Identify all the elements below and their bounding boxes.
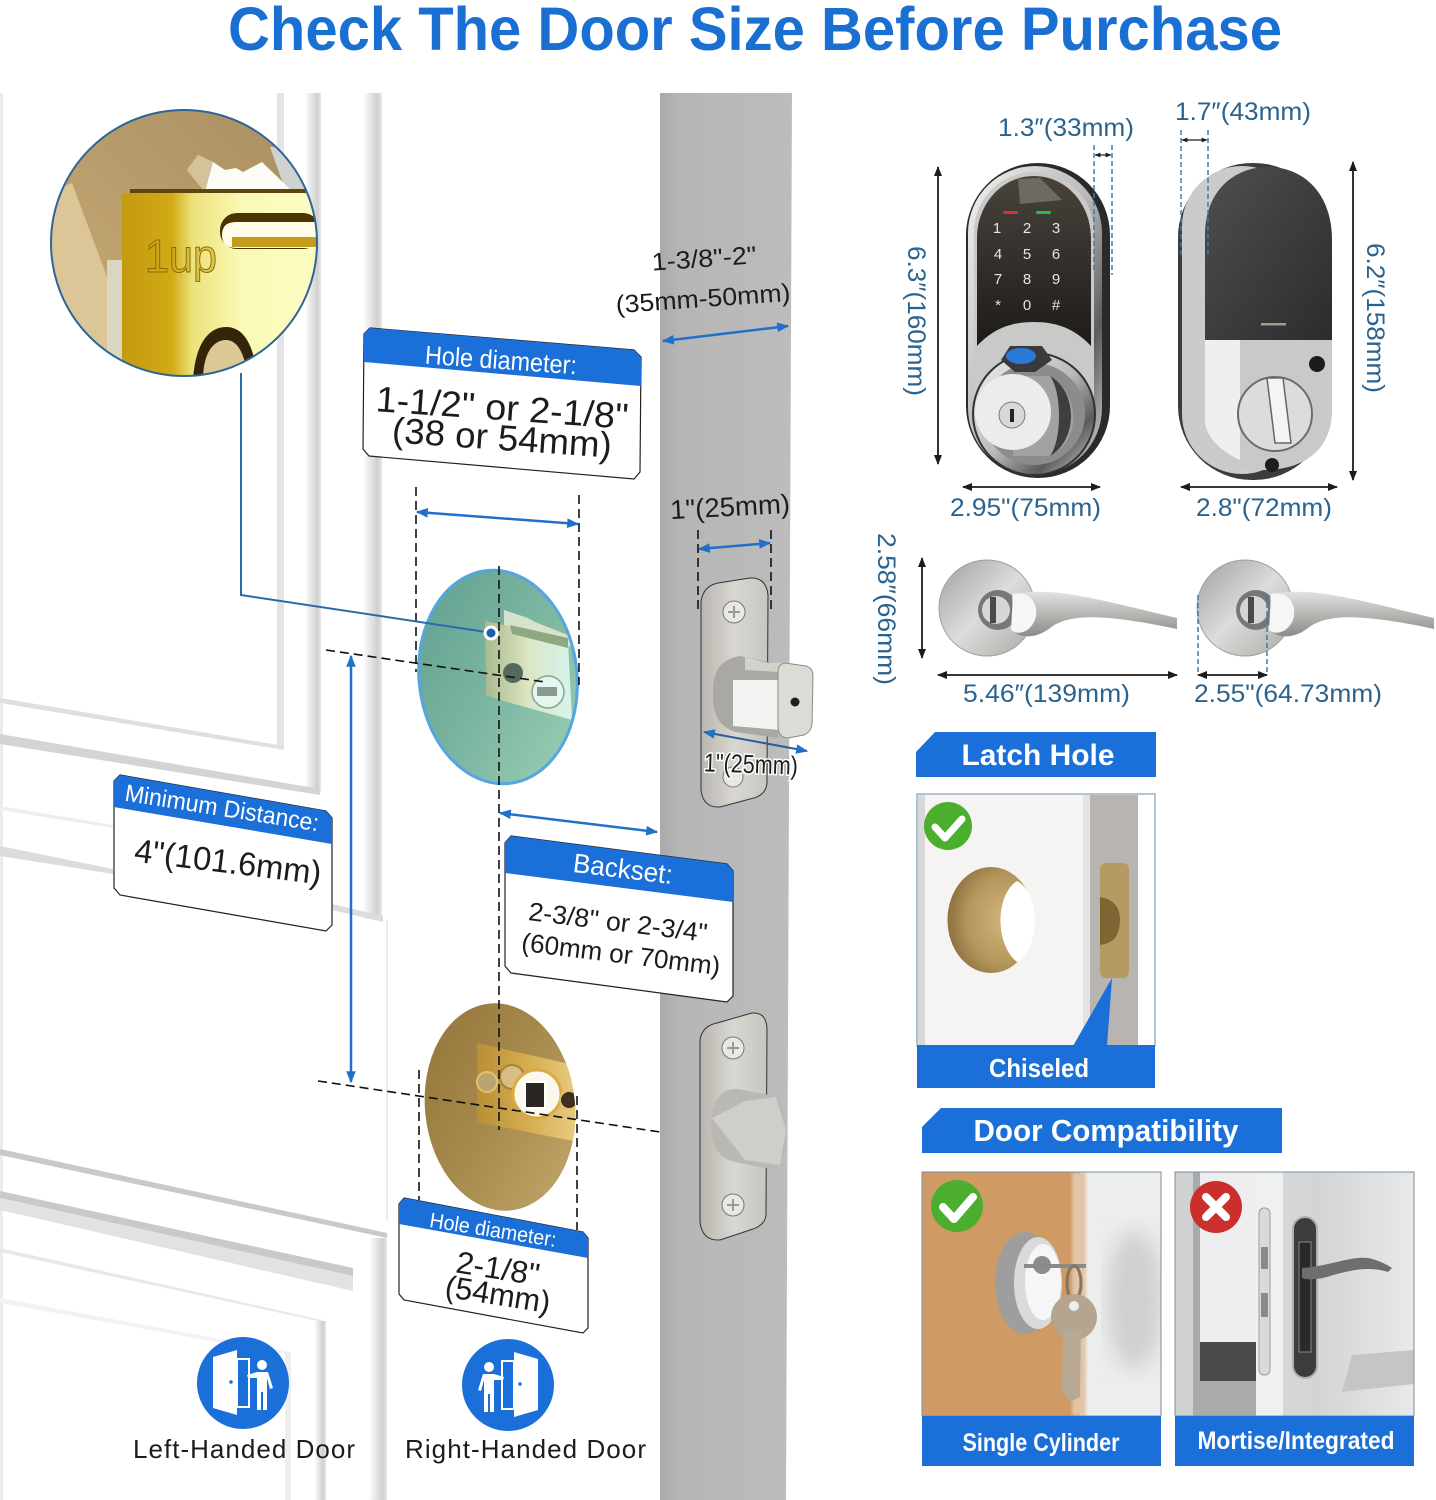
icon: green check compatibility bbox=[931, 1180, 983, 1232]
callout: backset: Backset: bbox=[572, 848, 674, 890]
dimension labels: 2.55"(64.73mm) bbox=[1194, 680, 1382, 708]
keypad digits: 0 bbox=[1023, 297, 1031, 314]
keypad digits: 5 bbox=[1023, 246, 1031, 263]
latch plate top bbox=[701, 578, 813, 807]
label: right-handed door: Right-Handed Door bbox=[405, 1434, 646, 1464]
callout: hole diameter bottom: (54mm) bbox=[443, 1269, 553, 1320]
callout: minimum distance: 4"(101.6mm) bbox=[133, 832, 324, 891]
callout: hole diameter top bbox=[363, 328, 641, 479]
dimension labels: 2.95"(75mm) bbox=[950, 494, 1101, 522]
teal lock hole bbox=[417, 568, 579, 786]
icon: left-handed door bbox=[197, 1337, 289, 1429]
icon: red cross bbox=[1190, 1181, 1242, 1233]
keypad digits: 6 bbox=[1052, 246, 1060, 263]
label: bolt width bbox=[703, 732, 807, 781]
icon: green check latch hole bbox=[924, 802, 972, 850]
callout: hole diameter bottom: Hole diameter: bbox=[428, 1209, 558, 1252]
callout: minimum distance bbox=[114, 775, 332, 931]
callout: backset: 2-3/8" or 2-3/4" bbox=[527, 896, 709, 948]
dimension lines on product bbox=[922, 130, 1353, 675]
magnifier: latch plate close-up bbox=[50, 108, 322, 380]
dimension labels: 1.3″(33mm) bbox=[998, 114, 1134, 142]
heading: door compatibility: Door Compatibility bbox=[974, 1113, 1239, 1148]
door frame edge bbox=[660, 93, 792, 1500]
keypad digits: # bbox=[1052, 297, 1061, 314]
smart lock back view bbox=[1178, 163, 1332, 480]
door lever right bbox=[1197, 560, 1434, 656]
keypad digits: * bbox=[995, 297, 1001, 314]
callout: hole diameter bottom bbox=[399, 1198, 588, 1333]
keypad digits: 4 bbox=[994, 246, 1002, 263]
heading: latch hole bbox=[916, 732, 1156, 777]
callout: backset bbox=[505, 836, 733, 1002]
dimension labels: 5.46″(139mm) bbox=[963, 680, 1130, 708]
keypad digits bbox=[993, 220, 1061, 314]
keypad digits: 8 bbox=[1023, 271, 1031, 288]
callout line from magnifier to teal hole bbox=[241, 373, 497, 639]
keypad digits: 2 bbox=[1023, 220, 1031, 237]
dimension labels: 6.3″(160mm) bbox=[902, 246, 930, 396]
label: bolt width: 1"(25mm) bbox=[703, 747, 798, 781]
dimension labels: 2.58″(66mm) bbox=[872, 533, 900, 685]
panel: latch hole chiseled: Chiseled bbox=[989, 1053, 1089, 1083]
callout: hole diameter top: (38 or 54mm) bbox=[391, 409, 613, 466]
dimension labels: 6.2″(158mm) bbox=[1361, 243, 1389, 393]
panel: latch hole chiseled bbox=[917, 794, 1155, 1088]
dimension labels: 2.8"(72mm) bbox=[1196, 494, 1332, 522]
callout: hole diameter top: Hole diameter: bbox=[424, 340, 578, 380]
door lever left bbox=[939, 560, 1177, 656]
keypad digits: 1 bbox=[993, 220, 1001, 237]
heading: door compatibility bbox=[922, 1108, 1282, 1153]
dashed construction lines bbox=[318, 487, 771, 1230]
panel: single cylinder bbox=[922, 1172, 1163, 1466]
keypad digits: 3 bbox=[1052, 220, 1060, 237]
bronze lock hole bbox=[424, 1003, 576, 1211]
label: door thickness: (35mm-50mm) bbox=[615, 279, 791, 319]
magnifier: latch plate close-up: 1up bbox=[145, 230, 217, 282]
label: left-handed door: Left-Handed Door bbox=[133, 1434, 355, 1464]
panel: mortise integrated bbox=[1175, 1172, 1414, 1466]
callout: hole diameter bottom: 2-1/8" bbox=[454, 1245, 542, 1292]
callout: backset: (60mm or 70mm) bbox=[520, 927, 722, 981]
door with moulding panels bbox=[0, 93, 388, 1500]
label: door thickness: 1-3/8"-2" bbox=[651, 241, 757, 277]
smart lock front view bbox=[966, 163, 1110, 478]
dimension labels bbox=[872, 98, 1389, 708]
latch plate bottom bbox=[700, 1013, 786, 1240]
label: bolt length: 1"(25mm) bbox=[669, 489, 791, 525]
dimension labels: 1.7″(43mm) bbox=[1175, 98, 1311, 126]
label: door thickness bbox=[615, 241, 791, 319]
callout: minimum distance: Minimum Distance: bbox=[123, 780, 321, 837]
blue dimension arrows on door bbox=[351, 326, 788, 1082]
keypad digits: 9 bbox=[1052, 271, 1060, 288]
keypad digits: 7 bbox=[994, 271, 1002, 288]
icon: right-handed door bbox=[462, 1339, 554, 1431]
panel: single cylinder: Single Cylinder bbox=[962, 1429, 1120, 1457]
panel: mortise integrated: Mortise/Integrated bbox=[1198, 1427, 1394, 1455]
heading: latch hole: Latch Hole bbox=[962, 739, 1114, 772]
callout: hole diameter top: 1-1/2" or 2-1/8" bbox=[375, 378, 630, 437]
